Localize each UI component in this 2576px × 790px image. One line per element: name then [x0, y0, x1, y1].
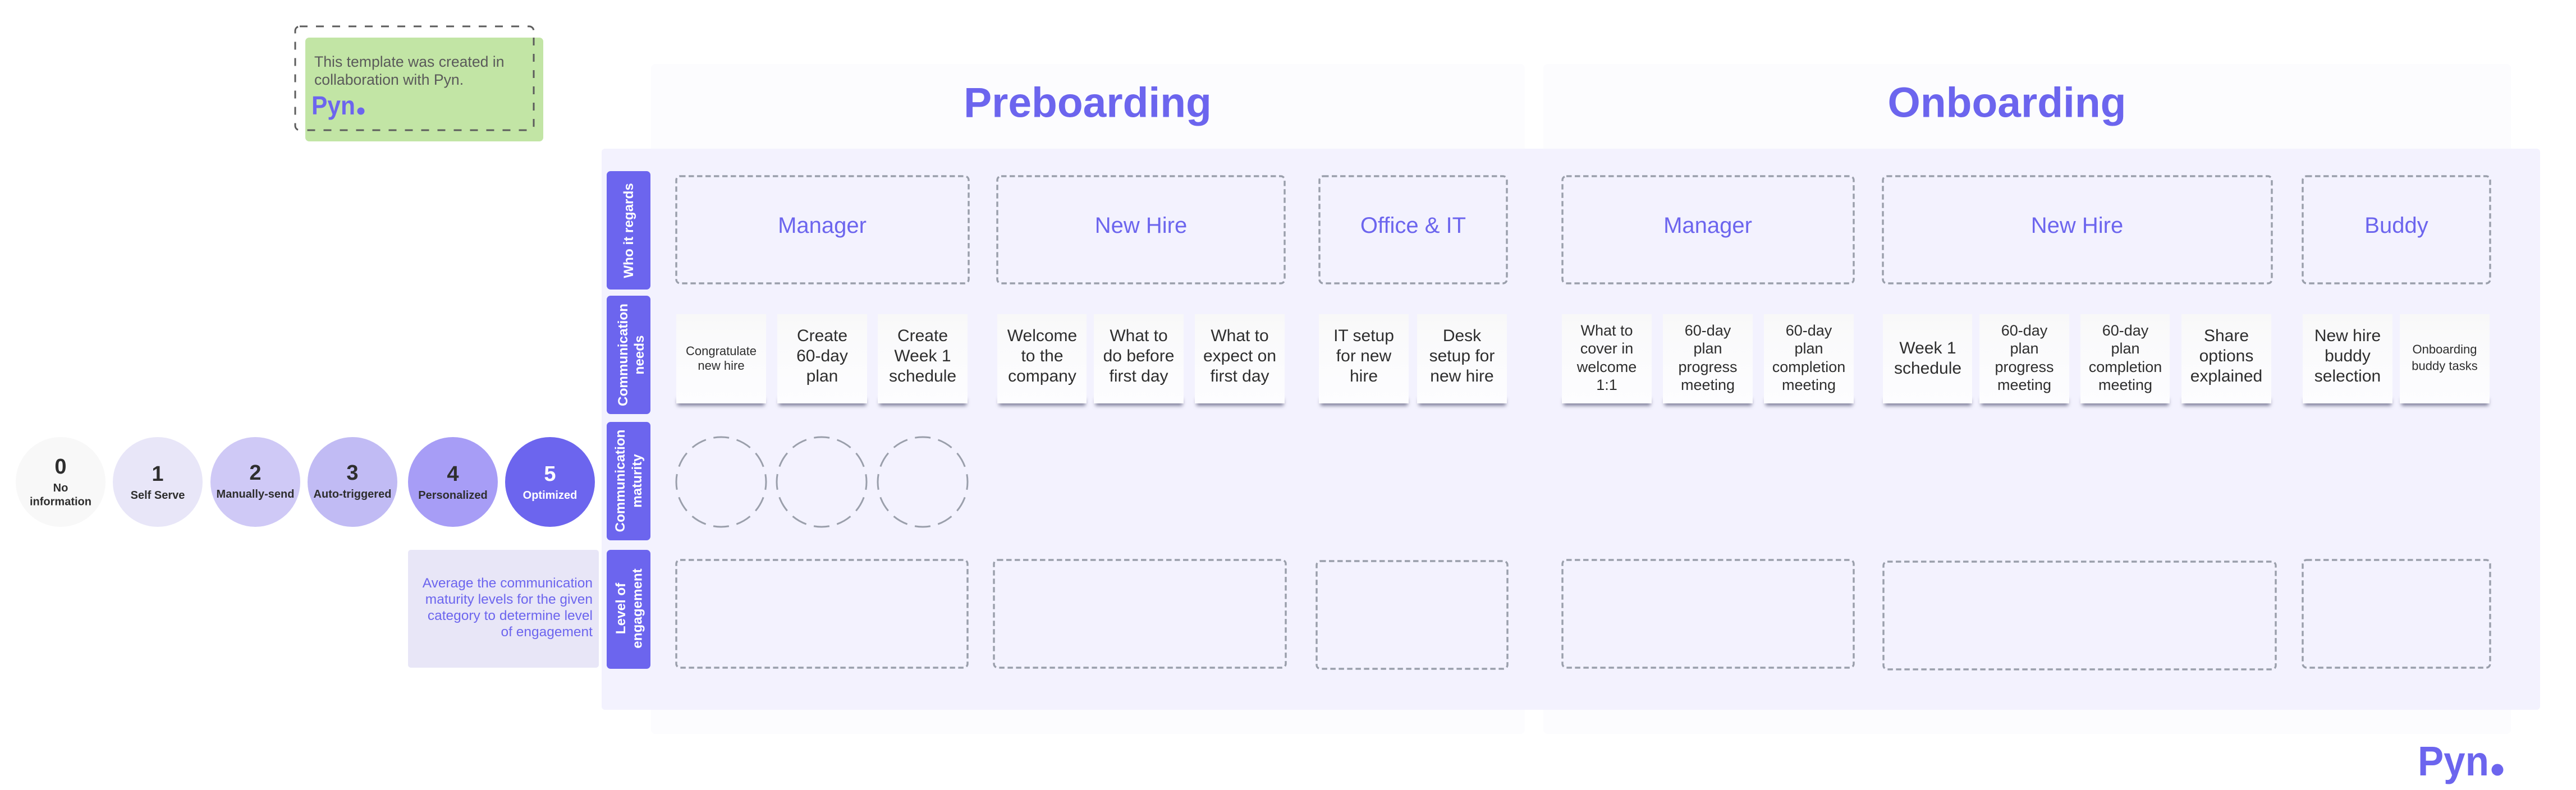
title: Onboarding: Onboarding	[1888, 79, 2126, 126]
sticky: Create Week 1 schedule: schedule	[889, 367, 956, 385]
sticky: What to cover in welcome 1:1: What to	[1580, 322, 1633, 339]
row header: Level of engagement: Level of	[613, 582, 629, 634]
sticky: IT setup for new hire	[1319, 314, 1409, 406]
level 4: 4	[447, 462, 459, 486]
sticky: 60-day plan completion meeting: meeting	[1782, 376, 1836, 393]
callout: averaging instructions: Average the communication	[423, 576, 593, 591]
sticky: Desk setup for new hire: new hire	[1430, 367, 1494, 385]
sticky: Welcome to the company: company	[1008, 367, 1076, 385]
row header: Who it regards: Who it regards	[621, 183, 636, 278]
sticky: Welcome to the company: Welcome	[1007, 327, 1077, 345]
sticky: 60-day plan completion meeting (new hire): completion	[2089, 359, 2162, 375]
collaboration note	[295, 26, 543, 141]
logo: Pyn footer: Pyn	[2418, 738, 2489, 784]
sticky: Week 1 schedule: Week 1	[1899, 339, 1956, 357]
level 3: Auto-triggered	[314, 488, 391, 500]
sticky: Onboarding buddy tasks	[2400, 314, 2490, 406]
level 0: No	[53, 482, 68, 494]
green note	[305, 38, 543, 141]
audience: New Hire (preboarding)	[997, 176, 1285, 283]
engagement box: Manager (preboarding)	[676, 560, 968, 668]
row header: Level of engagement	[607, 550, 650, 669]
sticky: Desk setup for new hire: Desk	[1443, 327, 1482, 345]
sticky: What to do before first day: first day	[1109, 367, 1168, 385]
maturity scale legend	[16, 437, 595, 527]
sticky: 60-day plan completion meeting (new hire): plan	[2111, 340, 2140, 357]
sticky: What to do before first day	[1094, 314, 1184, 406]
level 2: Manually-send	[217, 488, 294, 500]
level 5: Optimized	[523, 489, 577, 502]
audience: Buddy: Buddy	[2364, 213, 2428, 238]
sticky: Onboarding buddy tasks: Onboarding	[2413, 342, 2477, 356]
sticky: Create 60-day plan	[777, 314, 867, 406]
sticky: Week 1 schedule: schedule	[1894, 359, 1961, 378]
sticky: 60-day plan completion meeting	[1764, 314, 1854, 406]
sticky: What to expect on first day: first day	[1210, 367, 1269, 385]
level 5	[505, 437, 595, 527]
sticky: IT setup for new hire: IT setup	[1333, 327, 1394, 345]
engagement box: Manager (onboarding)	[1562, 560, 1854, 668]
sticky: Share options explained: Share	[2204, 327, 2249, 345]
sticky: What to do before first day: What to	[1110, 327, 1168, 345]
level 3: 3	[346, 461, 359, 485]
row header: Communication maturity	[607, 422, 650, 540]
callout: averaging instructions: of engagement	[501, 624, 593, 640]
sticky: Congratulate new hire: Congratulate	[686, 344, 757, 358]
sticky: New hire buddy selection	[2303, 314, 2392, 406]
engagement box: New Hire (onboarding)	[1883, 562, 2276, 669]
dashed frame overlay	[305, 38, 534, 130]
engagement box: Office & IT	[1317, 561, 1507, 669]
sticky: Create 60-day plan: Create	[797, 327, 847, 345]
sticky: New hire buddy selection: buddy	[2325, 347, 2371, 365]
sticky: Share options explained	[2181, 314, 2271, 406]
level 2: 2	[249, 461, 262, 485]
audience: Manager (onboarding)	[1562, 176, 1854, 283]
callout: averaging instructions	[408, 550, 599, 668]
sticky: 60-day plan completion meeting (new hire)	[2080, 314, 2170, 406]
sticky: 60-day plan completion meeting: 60-day	[1786, 322, 1832, 339]
panel: main matrix background	[602, 149, 2540, 710]
sticky: Create Week 1 schedule: Create	[897, 327, 948, 345]
level 0: 0	[54, 455, 67, 479]
sticky: 60-day plan progress meeting: plan	[1693, 340, 1722, 357]
audience: Office & IT	[1319, 176, 1507, 283]
maturity placeholder circle 2	[777, 437, 867, 527]
sticky: 60-day plan completion meeting (new hire): 60-day	[2102, 322, 2149, 339]
maturity placeholder circle 3	[878, 437, 968, 527]
sticky: 60-day plan progress meeting: meeting	[1681, 376, 1735, 393]
dashed frame	[295, 26, 534, 130]
sticky: Create 60-day plan: 60-day	[796, 347, 848, 365]
sticky: Desk setup for new hire: setup for	[1429, 347, 1495, 365]
audience: Manager (preboarding)	[676, 176, 969, 283]
level 0	[16, 437, 106, 527]
sticky: 60-day plan progress meeting (new hire)	[1979, 314, 2069, 406]
audience: Manager (preboarding): Manager	[778, 213, 867, 238]
level 2	[210, 437, 300, 527]
panel: preboarding header	[651, 64, 1525, 734]
sticky: What to expect on first day: expect on	[1203, 347, 1276, 365]
row header: Level of engagement: engagement	[630, 568, 645, 649]
panel: onboarding header	[1543, 64, 2511, 734]
title: Preboarding: Preboarding	[964, 79, 1212, 126]
sticky: 60-day plan progress meeting: 60-day	[1685, 322, 1731, 339]
sticky: What to cover in welcome 1:1	[1562, 314, 1652, 406]
row header: Communication maturity: Communication	[613, 430, 628, 532]
sticky: Onboarding buddy tasks: buddy tasks	[2412, 359, 2478, 373]
sticky: New hire buddy selection: New hire	[2314, 327, 2381, 345]
level 3	[308, 437, 397, 527]
sticky: Share options explained: options	[2199, 347, 2253, 365]
sticky: 60-day plan progress meeting (new hire): progress	[1995, 359, 2054, 375]
sticky: 60-day plan completion meeting: completion	[1772, 359, 1845, 375]
sticky: What to expect on first day: What to	[1211, 327, 1269, 345]
sticky: Share options explained: explained	[2190, 367, 2262, 385]
row header: Who it regards	[607, 171, 650, 290]
audience: Manager (onboarding): Manager	[1663, 213, 1752, 238]
callout: averaging instructions: category to determine level	[428, 608, 593, 623]
level 4: Personalized	[418, 489, 488, 502]
sticky: What to cover in welcome 1:1: 1:1	[1596, 376, 1617, 393]
sticky: 60-day plan progress meeting (new hire): meeting	[1997, 376, 2051, 393]
audience: New Hire (onboarding)	[1883, 176, 2272, 283]
sticky: Congratulate new hire: new hire	[698, 359, 745, 373]
sticky: New hire buddy selection: selection	[2314, 367, 2381, 385]
level 1: Self Serve	[131, 489, 185, 502]
sticky: Welcome to the company: to the	[1021, 347, 1064, 365]
sticky: 60-day plan progress meeting (new hire): plan	[2010, 340, 2039, 357]
row header: Communication needs	[607, 296, 650, 414]
sticky: 60-day plan completion meeting (new hire): meeting	[2098, 376, 2152, 393]
callout: averaging instructions: maturity levels for the given	[425, 592, 593, 607]
note text: collaboration with Pyn.	[314, 71, 464, 88]
sticky: What to do before first day: do before	[1103, 347, 1174, 365]
audience: Office & IT: Office & IT	[1360, 213, 1466, 238]
row header: Communication needs: Communication	[616, 304, 631, 406]
sticky: Create 60-day plan: plan	[806, 367, 838, 385]
level 1	[113, 437, 203, 527]
sticky: IT setup for new hire: for new	[1336, 347, 1392, 365]
sticky: IT setup for new hire: hire	[1350, 367, 1378, 385]
level 5: 5	[544, 462, 556, 486]
sticky: Create Week 1 schedule: Week 1	[894, 347, 951, 365]
maturity placeholder circle 1	[676, 437, 766, 527]
row header: Communication needs: needs	[632, 336, 647, 374]
engagement box: Buddy	[2303, 560, 2490, 668]
engagement box: New Hire (preboarding)	[994, 560, 1286, 668]
sticky: What to expect on first day	[1195, 314, 1285, 406]
level 4	[408, 437, 498, 527]
note text: This template was created in	[314, 53, 504, 70]
sticky: 60-day plan progress meeting: progress	[1678, 359, 1738, 375]
audience: Buddy	[2303, 176, 2490, 283]
sticky: 60-day plan progress meeting (new hire): 60-day	[2001, 322, 2048, 339]
level 0: information	[30, 496, 91, 508]
sticky: What to cover in welcome 1:1: cover in	[1580, 340, 1633, 357]
sticky: 60-day plan progress meeting	[1663, 314, 1753, 406]
row header: Communication maturity: maturity	[630, 454, 645, 508]
logo: Pyn: Pyn	[311, 91, 355, 120]
level 1: 1	[152, 462, 164, 486]
audience: New Hire (onboarding): New Hire	[2031, 213, 2123, 238]
sticky: Congratulate new hire	[676, 314, 766, 406]
sticky: 60-day plan completion meeting: plan	[1794, 340, 1823, 357]
sticky: Create Week 1 schedule	[878, 314, 968, 406]
audience: New Hire (preboarding): New Hire	[1095, 213, 1187, 238]
sticky: Desk setup for new hire	[1417, 314, 1507, 406]
sticky: Week 1 schedule	[1883, 314, 1972, 406]
sticky: What to cover in welcome 1:1: welcome	[1576, 359, 1637, 375]
sticky: Welcome to the company	[997, 314, 1087, 406]
